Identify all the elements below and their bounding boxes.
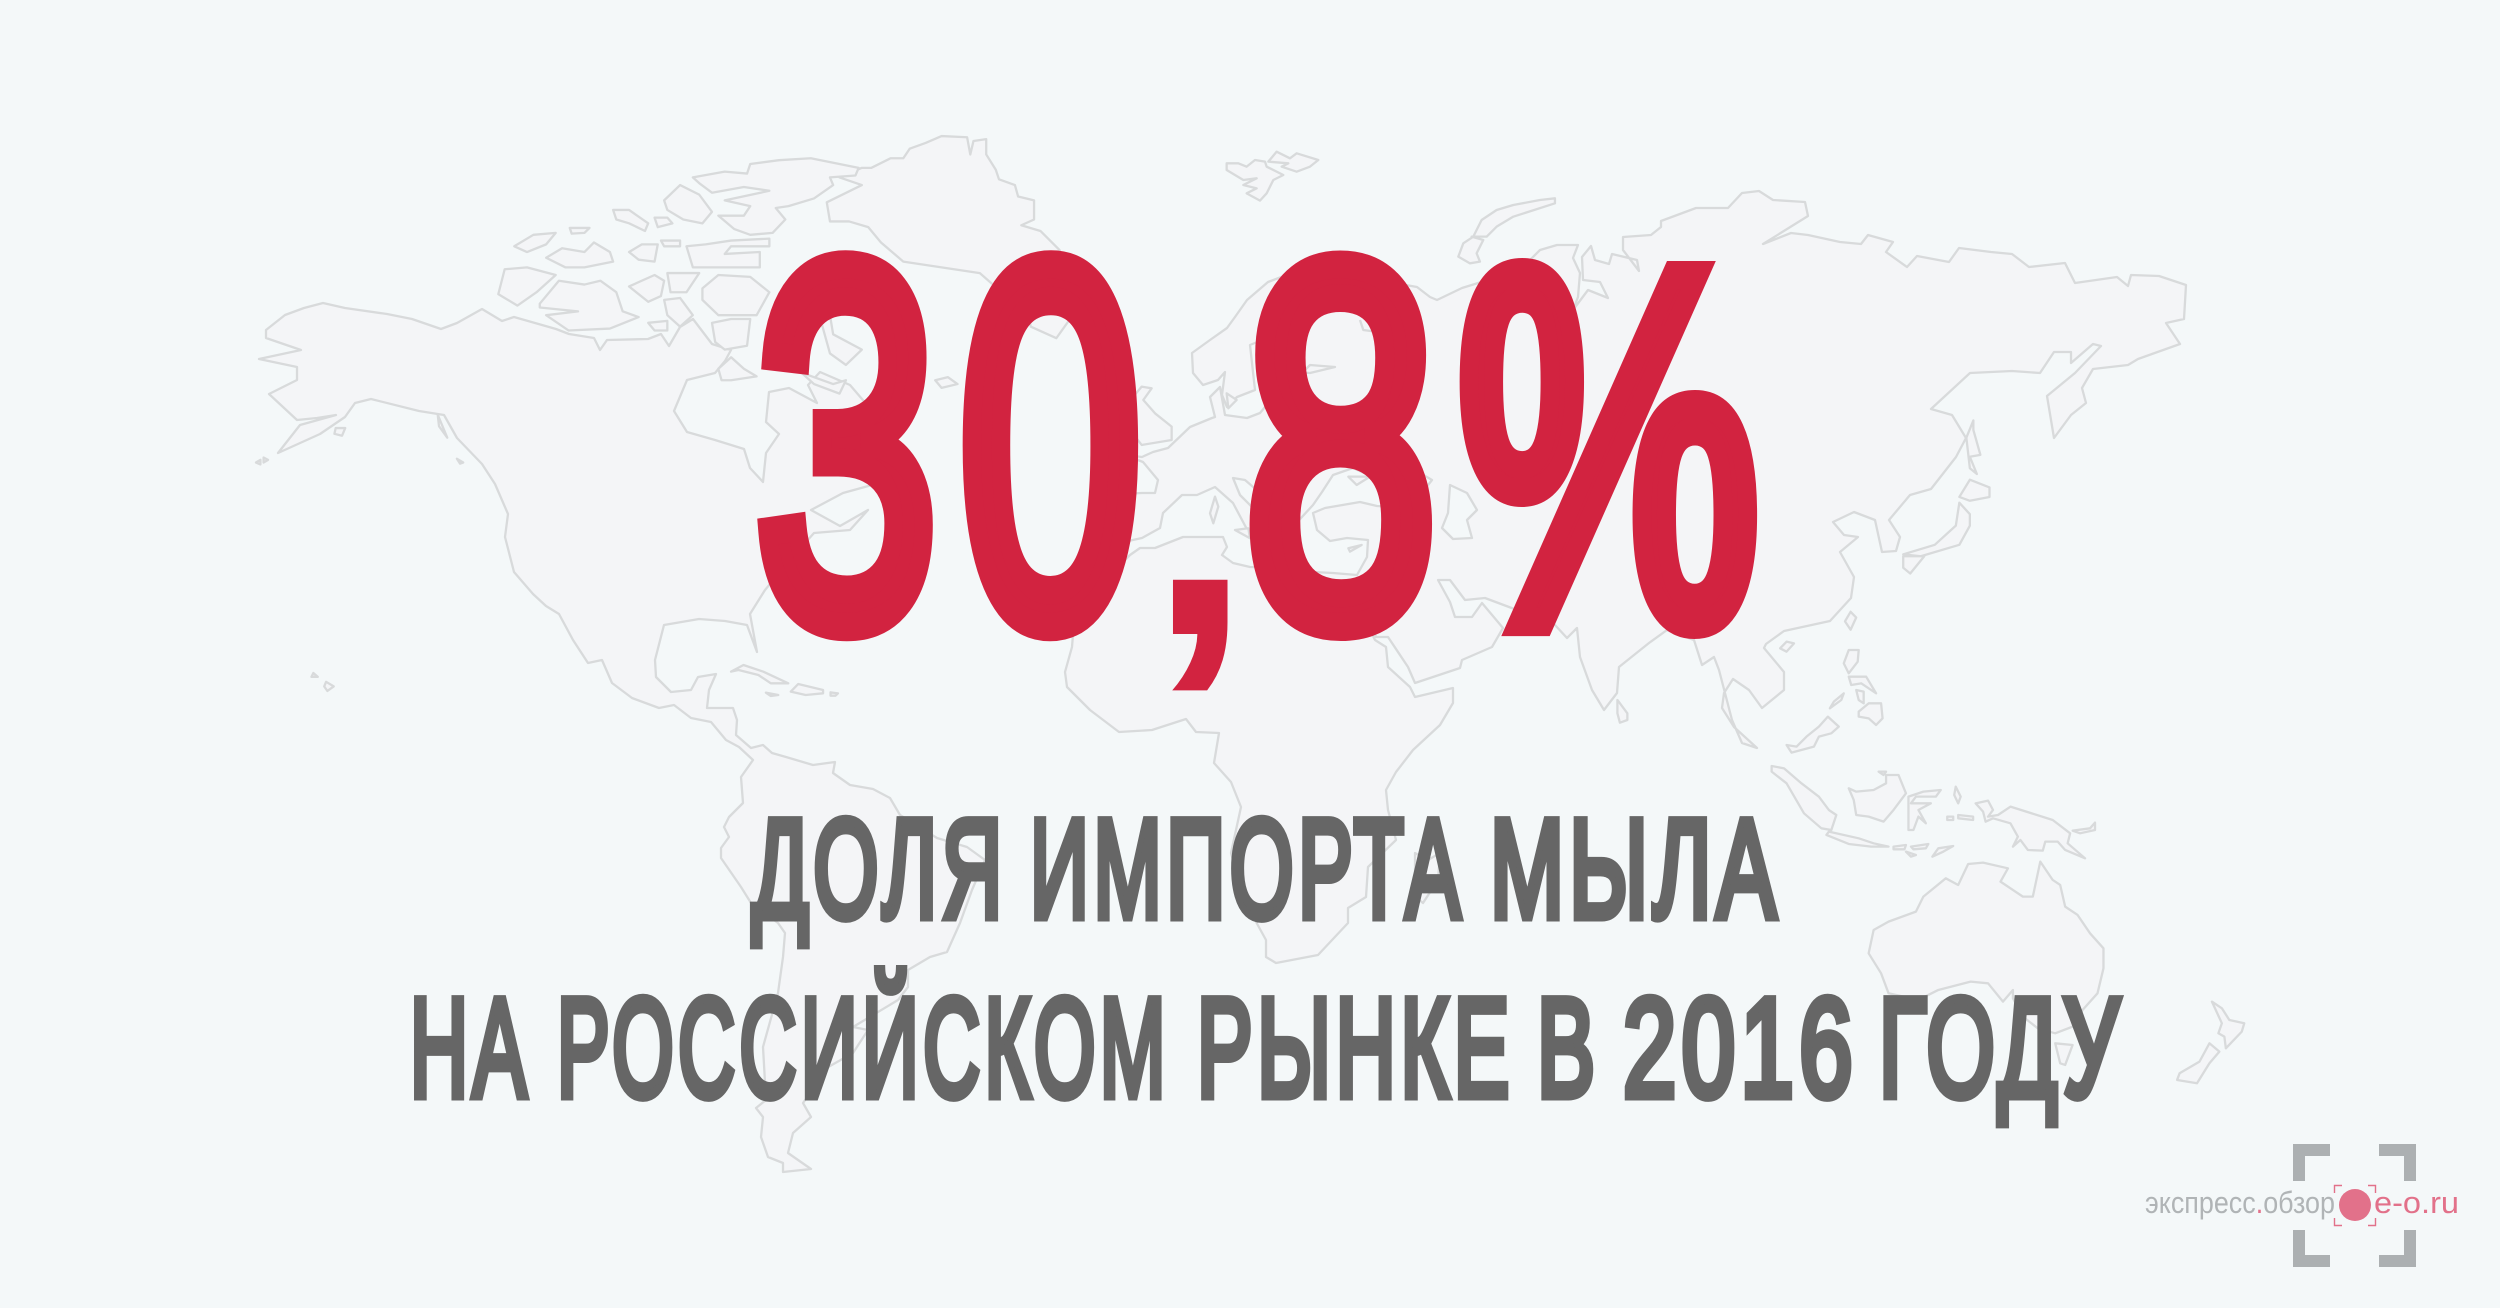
heading line 1: ДОЛЯ [752, 790, 1007, 947]
sea: Caspian [1442, 485, 1477, 539]
heading line 2: ГОДУ [1879, 969, 2124, 1126]
islands: Arctic Canada, Greenland and Pacific North America [256, 136, 1076, 691]
logo wordmark: экспресс.обзор [2145, 1185, 2335, 1220]
logo inner brackets [2334, 1186, 2376, 1226]
logo domain: e-o.ru [2374, 1185, 2459, 1220]
main figure: 30,8%: % [1457, 166, 1760, 730]
main figure: 30,8% [755, 159, 1760, 731]
main figure: 30,8%: 8 [1244, 159, 1438, 731]
islands: Caribbean [731, 665, 838, 696]
heading line 2: В [1537, 969, 1600, 1126]
logo: express review e-o.ru [2145, 1144, 2459, 1267]
islands: Japan, Sakhalin and Taiwan [1845, 420, 1990, 630]
main figure: 30,8%: , [1146, 304, 1253, 712]
heading line 2: 2016 [1623, 969, 1858, 1126]
logo frame corners [2293, 1144, 2416, 1267]
islands: South-East Asia and Oceania [1617, 642, 2244, 1083]
heading line 1: ИМПОРТА [1030, 790, 1465, 947]
island: Madagascar [1410, 853, 1440, 903]
world map outline [256, 136, 2244, 1172]
heading line 2: НА [410, 969, 531, 1126]
main figure: 30,8%: 0 [959, 160, 1142, 731]
logo red dot [2339, 1189, 2371, 1221]
heading line 2 [410, 969, 2124, 1126]
continent: Americas [259, 303, 985, 1172]
main figure: 30,8%: 3 [755, 159, 938, 731]
heading line 2: РЫНКЕ [1197, 969, 1514, 1126]
heading line 2: РОССИЙСКОМ [557, 969, 1170, 1126]
islands: Svalbard, Novaya Zemlya, UK and Mediterranean [1130, 152, 1555, 552]
heading line 1: МЫЛА [1490, 790, 1781, 947]
heading: import share [410, 790, 2124, 1126]
continent: Eurasia and Africa [1065, 191, 2186, 963]
